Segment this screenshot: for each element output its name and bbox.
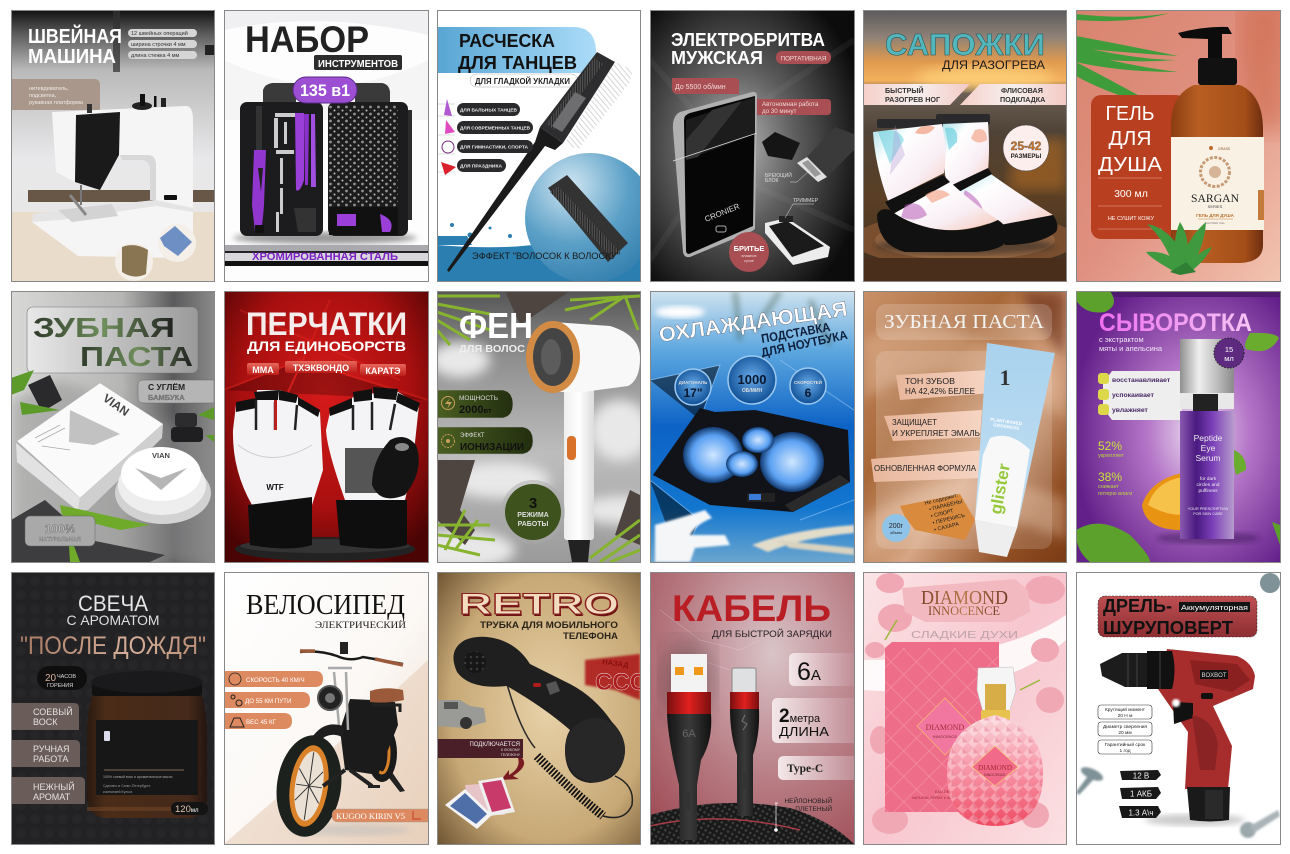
list: dance types (437, 99, 533, 175)
badge: sizes (1003, 125, 1049, 171)
brush labels: 1 АКБ (1130, 790, 1152, 798)
icon: paste box (16, 383, 163, 511)
stats: 38% (1098, 470, 1122, 484)
title: С АРОМАТОМ (66, 612, 160, 628)
title (886, 34, 1045, 72)
icon: pump bottle: ГЕЛЬ ДЛЯ ДУША (1196, 213, 1235, 218)
card: electric shaver (650, 10, 854, 281)
card: martial arts gloves (224, 291, 428, 562)
title panel: ДЛЯ ГЛАДКОЙ УКЛАДКИ (475, 77, 570, 86)
card: cordless drill (1076, 572, 1280, 844)
icon: rat tail comb (447, 52, 633, 272)
glass panel (876, 351, 1052, 549)
icon: shaving head: БРЕЮЩИЙ (765, 171, 792, 179)
icon: right glove (326, 387, 420, 548)
badge: volume: 15 (1225, 345, 1233, 354)
title: ДЛЯ БЫСТРОЙ ЗАРЯДКИ (712, 628, 832, 640)
icon: tube: PLANT-BASED (990, 417, 1023, 426)
feature panels: ФЛИСОВАЯ (1001, 86, 1043, 95)
icon: perfume box: EAU DE TOILETTE (935, 790, 969, 794)
icon: pump bottle: GRASS (1218, 147, 1231, 151)
title panel: РАСЧЕСКА (459, 31, 555, 51)
icon: tube: GOODNESS (993, 422, 1019, 431)
list: dance types: ДЛЯ ПРАЗДНИКА (460, 164, 503, 170)
title: ДЛЯ НОУТБУКА (760, 328, 849, 360)
card: tool set (224, 10, 428, 281)
badge: shaving: влажное (741, 254, 757, 258)
icon: boots (873, 114, 1057, 254)
title: НАБОР (245, 19, 369, 60)
spec boxes (1098, 705, 1152, 754)
icon: candle jar (87, 671, 207, 818)
icon: screws (1076, 573, 1280, 838)
panels: features: СОЕВЫЙ (33, 706, 73, 717)
feature pills: СКОРОСТЬ 40 КМ/Ч (246, 677, 305, 684)
feature panels: РАЗОГРЕВ НОГ (885, 95, 940, 104)
card: electric bicycle (224, 572, 428, 844)
stroke: contains none (900, 492, 975, 540)
title: СЫВОРОТКА (1099, 309, 1252, 337)
spec panels: 2метра (779, 706, 821, 727)
icon: paste box: VIAN (100, 391, 132, 419)
list: dance types: ДЛЯ СОВРЕМЕННЫХ ТАНЦЕВ (460, 126, 531, 132)
stump (864, 222, 1066, 281)
stroke: contains none: • САХАРА (934, 521, 960, 533)
card: hair dryer (405, 291, 660, 570)
icon: shaving head (762, 127, 854, 184)
strokes: benefits (871, 370, 992, 482)
title panel: ДЛЯ ТАНЦЕВ (458, 53, 577, 73)
icon: tube: 1 (1000, 365, 1010, 390)
strokes: benefits: ТОН ЗУБОВ (905, 376, 955, 386)
stroke: contains none: • ПЕРЕКИСЬ (932, 513, 966, 527)
title (1099, 309, 1252, 353)
badge: volume (171, 802, 208, 815)
badge: bamboo charcoal (138, 380, 214, 403)
title panel: ДРЕЛЬ- (1103, 596, 1172, 616)
panel: benefits: успокаивает (1112, 392, 1155, 399)
subtitle: СЛАДКИЕ ДУХИ (911, 629, 1018, 641)
title (247, 26, 402, 70)
icon: handset (453, 637, 632, 818)
strokes: benefits: ОБНОВЛЕННАЯ ФОРМУЛА (874, 463, 976, 473)
badge: 135 in 1 (293, 77, 357, 103)
title (29, 24, 121, 63)
icon: serum bottle: for dark (1200, 476, 1217, 482)
badge: ionisation (437, 427, 533, 454)
badge: volume: 120мл (175, 804, 199, 815)
icon: orange (1142, 473, 1182, 530)
icon: charcoal bottom (11, 500, 165, 562)
icon: serum bottle: Serum (1195, 453, 1221, 463)
stats: укрепляет (1098, 453, 1124, 459)
panels: features: ВОСК (33, 717, 58, 727)
spec badges: Автономная работа (762, 101, 819, 108)
icon: serum bottle: Peptide (1194, 433, 1223, 443)
badge: shaving: БРИТЬЕ (734, 244, 764, 253)
title: ПОДСТАВКА (760, 320, 831, 346)
icon: perfume box: INNOCENCE (933, 734, 957, 739)
caption: ЭФФЕКТ "ВОЛОСОК К ВОЛОСКУ" (472, 251, 620, 261)
band: chrome steel: ХРОМИРОВАННАЯ СТАЛЬ (252, 251, 398, 263)
title banner: INNOCENCE (928, 603, 1000, 618)
spec badges: До 5500 об/мин (675, 83, 726, 91)
spec panels (772, 653, 854, 780)
title: "ПОСЛЕ ДОЖДЯ" (20, 632, 206, 660)
strokes: benefits: ЗАЩИЩАЕТ (892, 417, 937, 427)
spec boxes: 1 год (1119, 748, 1131, 754)
feature pills: ВЕС 45 КГ (246, 719, 277, 726)
badge: three modes: РАБОТЫ (518, 521, 549, 528)
badge: power: 2000вт (459, 404, 492, 416)
panel: feature note: подсветка, (29, 93, 57, 99)
spec badges (672, 78, 831, 115)
title: ШВЕЙНАЯ (28, 24, 122, 48)
badge: three modes: РЕЖИМА (517, 512, 549, 519)
panels: features: РАБОТА (33, 754, 68, 764)
brush labels (1119, 770, 1161, 818)
title (20, 591, 206, 660)
title: ТЕЛЕФОНА (563, 631, 619, 641)
icon: serum bottle (1156, 339, 1260, 544)
icon: charcoal top (11, 370, 214, 442)
panel: connection note (437, 739, 524, 780)
card: dance comb (438, 27, 640, 281)
badge: volume: мл (1224, 354, 1234, 363)
icon: car (437, 700, 486, 729)
spec pills: ширина строчки 4 мм (131, 42, 186, 48)
badge: burn time: 20 (45, 673, 57, 684)
panel: connection note: К ЛЮБОМУ (501, 748, 521, 752)
icon: bicycle (270, 642, 410, 841)
panel: benefits: увлажняет (1112, 407, 1149, 414)
feature pills: ДО 55 КМ ПУТИ (245, 698, 291, 705)
badge: weight (882, 514, 910, 542)
icon: serum bottle: Eye (1201, 443, 1216, 453)
card: fast charge cable (650, 572, 854, 844)
stats: снижает (1098, 484, 1119, 490)
badge: sizes: РАЗМЕРЫ (1011, 154, 1041, 160)
spec pills (128, 29, 197, 59)
title panel (27, 307, 198, 373)
title: ОХЛАЖДАЮЩАЯ (657, 298, 849, 347)
icon: drill: BOXBOT (1201, 673, 1227, 679)
snow branches (655, 510, 854, 562)
icon: paste jar (115, 447, 211, 524)
panels: features: АРОМАТ (33, 792, 71, 802)
badge: power: МОЩНОСТЬ (459, 395, 498, 402)
icon: trimmer: ТРИММЕР (793, 198, 819, 204)
icon: comb closeup (548, 175, 628, 262)
card: warm-up boots (864, 11, 1066, 281)
icon: tube (975, 343, 1055, 557)
title: с экстрактом (1099, 335, 1144, 344)
band: chrome steel (224, 245, 428, 266)
icon: pump bottle: SARGAN (1191, 191, 1239, 205)
card: whitening toothpaste (863, 291, 1066, 562)
panel: product name (1091, 95, 1186, 239)
list: dance types: ДЛЯ БАЛЬНЫХ ТАНЦЕВ (460, 108, 518, 114)
platform (235, 537, 415, 561)
flowers (865, 573, 1065, 834)
spec panels: ДЛИНА (779, 724, 829, 739)
title: САПОЖКИ (885, 27, 1045, 62)
spec circles: СКОРОСТЕЙ (794, 378, 822, 385)
brush labels: 12 В (1133, 772, 1149, 780)
title: КАБЕЛЬ (672, 588, 831, 629)
badge: model (332, 809, 428, 822)
tag pills (247, 361, 406, 376)
panel: connection note: ПОДКЛЮЧАЕТСЯ (469, 742, 520, 748)
feature pills (224, 671, 323, 729)
title panel (437, 27, 596, 87)
spec badges: до 30 минут (762, 108, 797, 115)
spec panels: 6А (797, 658, 821, 686)
panels: features: НЕЖНЫЙ (33, 781, 75, 792)
title panel (876, 304, 1052, 340)
feature panels (863, 84, 1066, 105)
tag pills: КАРАТЭ (365, 366, 401, 376)
icon: usb connector: 6А (682, 728, 696, 740)
callout: nylon braid: ПЛЕТЕНЫЙ (795, 804, 832, 813)
title: ПОРТАТИВНАЯ (781, 56, 826, 62)
icon: phones (445, 777, 515, 829)
badge: ionisation: ИОНИЗАЦИИ (460, 441, 524, 453)
icon: fabric swatch brown (115, 243, 153, 281)
icon: left glove (233, 390, 323, 548)
rocks and palms (437, 291, 640, 562)
title panel: ЗУБНАЯ ПАСТА (884, 311, 1045, 333)
icon: left glove: WTF (266, 483, 284, 492)
badge: shaving: сухое (744, 259, 754, 263)
title: ТРУБКА ДЛЯ МОБИЛЬНОГО (480, 620, 618, 630)
title panel: ШУРУПОВЕРТ (1103, 618, 1233, 638)
spec boxes: Диаметр сверления (1103, 724, 1147, 730)
spec pills: длина стежка 4 мм (131, 53, 179, 59)
icon: perfume bottle: INNOCENCE (984, 773, 1006, 777)
icon: tube: glister (986, 462, 1014, 516)
panels: features (11, 703, 85, 804)
badge: shaving (729, 232, 769, 272)
chart: water and circle (437, 153, 655, 283)
title: ЭЛЕКТРОБРИТВА (671, 30, 825, 50)
badge: burn time: ЧАСОВ (57, 674, 76, 680)
stroke: contains none: • СЛЮРТ (930, 508, 955, 520)
title: RETRO (460, 590, 620, 623)
icon: perfume box (885, 642, 999, 812)
panel: feature note: рукавная платформа (29, 100, 84, 106)
card: shower gel (1076, 0, 1290, 281)
icon: drill (1100, 649, 1255, 826)
badge: bamboo charcoal: С УГЛЁМ (148, 382, 185, 392)
badge: volume (1214, 338, 1244, 368)
title panel: ПАСТА (80, 341, 193, 372)
spec boxes: Крутящий момент (1105, 706, 1146, 713)
icon: pump bottle: SHOWER GEL (1205, 221, 1225, 225)
feature panels: БЫСТРЫЙ (885, 86, 924, 95)
spec panels: Type-C (787, 763, 823, 775)
icon: serum bottle: FOR SKIN CARE (1193, 512, 1223, 516)
title: ПЕРЧАТКИ (246, 306, 407, 342)
stamp: back to USSR: ССС (595, 669, 647, 696)
panels: features: РУЧНАЯ (33, 744, 70, 754)
icon: fabric swatch blue (158, 224, 196, 262)
card: sewing machine (11, 10, 214, 281)
card: retro handset (437, 572, 647, 844)
panel: connection note: ТЕЛЕФОНУ (501, 753, 521, 757)
title: мяты и апельсина (1099, 344, 1163, 353)
stamp: back to USSR: НАЗАД (602, 657, 630, 670)
icon: serum bottle: circles and (1197, 482, 1220, 488)
spec circles: 17" (683, 386, 703, 400)
badge: model: KUGOO KIRIN V5 (336, 811, 405, 821)
icon: perfume box: NATURAL SPRAY e 60 ml (912, 796, 957, 800)
icon: candle jar: 100% соевый воск и ароматическое масло (103, 775, 173, 779)
icon: candle jar: компанией Кульга (103, 790, 132, 794)
stats: потерю влаги (1098, 491, 1132, 497)
badge: ionisation: ЭФФЕКТ (460, 433, 485, 439)
title: ДЛЯ ЕДИНОБОРСТВ (247, 338, 406, 354)
callout: nylon braid (774, 796, 832, 832)
badge: burn time: ГОРЕНИЯ (47, 683, 73, 689)
badge: power (437, 390, 513, 418)
title panel: Аккумуляторная (1181, 603, 1248, 612)
icon: hair dryer (526, 321, 640, 562)
card: eye serum (1076, 291, 1280, 562)
title: ИНСТРУМЕНТОВ (318, 58, 398, 70)
panel: product name: ДЛЯ (1108, 128, 1152, 150)
icon: type-c connector (730, 668, 759, 816)
title panel (1098, 596, 1257, 638)
icon: serum bottle: YOUR PRESCRIPTION (1188, 507, 1229, 511)
icon: paste jar: VIAN (152, 451, 170, 460)
card: perfume (863, 572, 1066, 844)
title: ЭЛЕКТРИЧЕСКИЙ (315, 619, 406, 631)
title banner: DIAMOND (921, 587, 1008, 609)
title: ВЕЛОСИПЕД (246, 590, 405, 621)
badge: burn time (37, 666, 87, 690)
icon: sewing machine (32, 94, 193, 258)
braided cable (650, 803, 854, 844)
callout: nylon braid: НЕЙЛОНОВЫЙ (784, 796, 832, 805)
panel: product name: НЕ СУШИТ КОЖУ (1108, 216, 1155, 222)
brush labels: 1.3 А\ч (1128, 808, 1154, 818)
icon: leaves (1077, 13, 1178, 95)
panel: product name: ГЕЛЬ (1106, 103, 1154, 125)
icon: usb connector (662, 640, 714, 840)
spec circles: 1000 (738, 372, 766, 387)
icon: trimmer (765, 198, 830, 265)
badge: three modes: 3 (529, 495, 537, 512)
panel: benefits (1098, 371, 1182, 420)
badge: natural: НАТУРАЛЬНАЯ (39, 537, 81, 543)
card: scented candle (11, 572, 214, 844)
title: ДЛЯ ВОЛОС (459, 343, 525, 355)
spec circles: 6 (805, 386, 812, 400)
spec boxes: 20 мм (1118, 730, 1132, 736)
icon: perfume box: DIAMOND (926, 723, 965, 732)
strokes: benefits: НА 42,42% БЕЛЕЕ (905, 386, 975, 396)
card: laptop cooling stand (650, 291, 854, 562)
title: СВЕЧА (78, 591, 148, 616)
stats: 52% (1098, 439, 1122, 453)
title: RETRO (459, 588, 619, 621)
spec circles (675, 356, 826, 405)
icon: serum bottle: puffiness (1198, 488, 1218, 494)
panel: product name: 300 мл (1114, 188, 1148, 200)
icon: cooling stand (653, 408, 850, 512)
icon: pump bottle: SERIES (1208, 204, 1223, 209)
panel: benefits: восстанавливает (1112, 377, 1171, 384)
badge: three modes (501, 480, 565, 544)
badge: natural (25, 516, 95, 546)
panel: product name: ДУША (1098, 154, 1163, 176)
tag pills: ММА (252, 365, 274, 375)
badge: weight: 200г (889, 523, 904, 530)
title (459, 588, 620, 641)
tag pills: ТХЭКВОНДО (293, 363, 349, 373)
list: dance types: ДЛЯ ГИМНАСТИКИ, СПОРТА (460, 144, 529, 150)
spec circles: ДИАГОНАЛЬ (679, 380, 708, 385)
title: МУЖСКАЯ (671, 48, 763, 68)
icon: perfume bottle: DIAMOND (978, 764, 1012, 772)
icon: candle jar: Сделано в Санкт-Петербурге (103, 784, 150, 788)
title: ДЛЯ РАЗОГРЕВА (942, 60, 1045, 72)
stats (1098, 439, 1132, 497)
badge: sizes: 25-42 (1011, 139, 1042, 153)
title banner (902, 579, 1030, 622)
title: ФЕН (459, 305, 533, 346)
feature panels: ПОДКЛАДКА (1000, 95, 1045, 104)
stroke: contains none: Не содержит: (924, 493, 959, 507)
stamp: back to USSR (585, 654, 647, 700)
badge: 135 in 1: 135 в1 (300, 81, 350, 100)
spec circles: ОБ/МИН (742, 388, 763, 394)
badge: weight: объем (890, 530, 902, 535)
title: МАШИНА (28, 46, 116, 68)
badge: natural: 100% (45, 522, 76, 536)
icon: shaver body: CRONIER (703, 202, 741, 224)
card: charcoal toothpaste (11, 291, 214, 562)
spec boxes: 20 Н м (1118, 713, 1132, 719)
icon: aloe (1146, 222, 1212, 275)
icon: shaver body (673, 92, 757, 257)
panel: feature note (11, 79, 100, 110)
title (672, 33, 831, 64)
strokes: benefits: И УКРЕПЛЯЕТ ЭМАЛЬ (892, 428, 980, 438)
spec pills: 12 швейных операций (131, 30, 188, 37)
icon: tool case (233, 83, 417, 244)
icon: pump bottle (1171, 27, 1264, 263)
icon: leaves (1076, 291, 1280, 562)
badge: bamboo charcoal: БАМБУКА (148, 393, 185, 402)
spec boxes: Гарантийный срок (1105, 741, 1146, 748)
icon: shaving head: БЛОК (765, 178, 778, 184)
panel: feature note: нитевдеватель, (29, 86, 69, 92)
icon: perfume bottle (947, 667, 1043, 826)
stroke: contains none: • ПАРАБЕНЫ (929, 499, 963, 513)
title panel: ЗУБНАЯ (33, 312, 175, 343)
